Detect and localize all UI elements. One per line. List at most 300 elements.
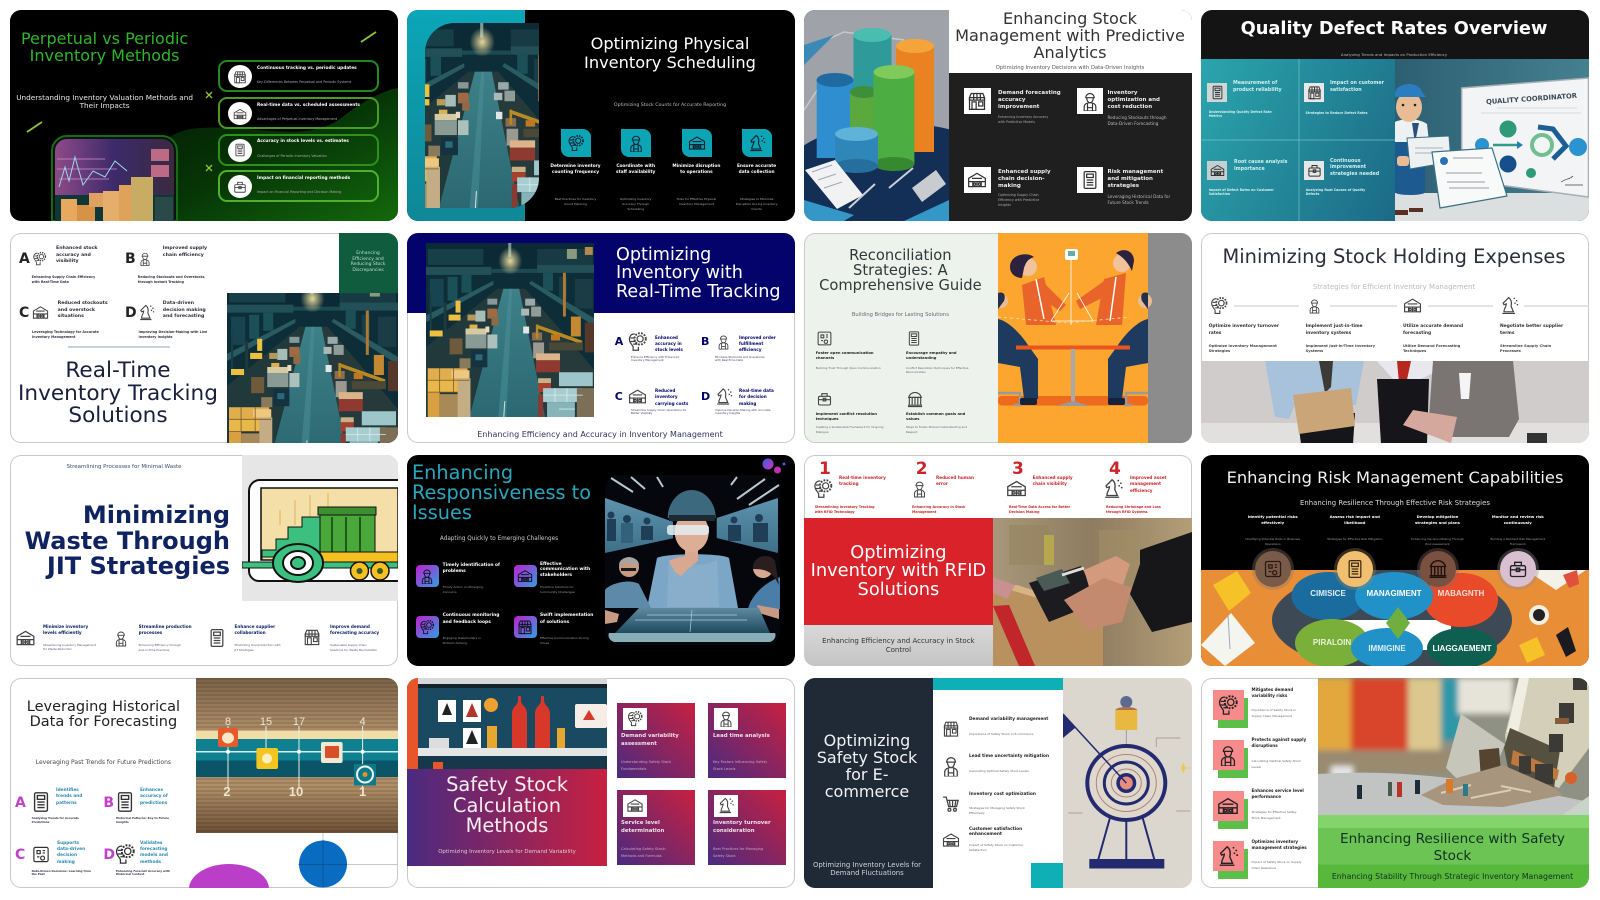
- item text: Impact on customer: [1330, 81, 1384, 86]
- icon: [1005, 478, 1028, 499]
- item note: Reducing Shrinkage and Loss: [1106, 504, 1161, 508]
- image: warehouse: [425, 23, 539, 208]
- step: develop: [1396, 513, 1479, 589]
- item note: Data-Driven Forecasting: [1108, 121, 1158, 126]
- item A: [615, 330, 699, 366]
- image: recycling truck illustration: [242, 455, 398, 601]
- item text: [257, 176, 350, 194]
- card text: Inventory turnover: [713, 820, 771, 826]
- item text: Validates: [140, 841, 162, 846]
- item note: Enhancing Inventory Accuracy: [998, 114, 1048, 118]
- letter: A: [19, 250, 30, 266]
- item note: Proactive Solutions for: [540, 585, 574, 589]
- item note: Better Visibility: [631, 411, 652, 415]
- step note: Risk Assessment: [1425, 542, 1450, 546]
- item note: [234, 643, 280, 653]
- item: demand variability: [940, 718, 1058, 740]
- item text: decision: [57, 853, 77, 858]
- step note: Enhancing Decision-Making Through: [1411, 536, 1464, 540]
- card note: Methods and Formulas: [621, 854, 662, 858]
- item note: Supply Chain Management: [1252, 714, 1292, 718]
- item note: Steps to Foster Mutual Understanding and: [906, 425, 967, 429]
- item text: [443, 613, 499, 627]
- title: Responsiveness to: [412, 481, 591, 504]
- item text: [936, 475, 974, 488]
- panel: Optimizing Inventory with Real-Time Tracking: [407, 232, 794, 443]
- step: minimize disruption: [672, 129, 720, 206]
- letter: D: [125, 304, 137, 320]
- item note: Strategies for Managing Safety Stock: [969, 806, 1025, 810]
- item text: Supports: [57, 841, 79, 846]
- item text: Continuous monitoring: [443, 613, 499, 618]
- icon: [940, 755, 962, 776]
- image: collapsed building miniature: [1318, 678, 1589, 816]
- item note: Conflict Resolution Techniques for Effective: [906, 366, 968, 370]
- icon: [911, 478, 928, 499]
- step text: [616, 164, 656, 175]
- number: 3: [1012, 459, 1024, 479]
- card text: assessment: [621, 741, 657, 747]
- item text: [816, 412, 877, 422]
- icon: [302, 628, 322, 646]
- callout text: [351, 251, 385, 273]
- item note: [32, 816, 79, 824]
- image: strategy circles on desk: [1201, 570, 1589, 666]
- item note: [540, 585, 575, 596]
- item text: channels: [816, 356, 834, 360]
- item text: for decision: [739, 394, 767, 399]
- title: Optimizing: [850, 542, 947, 563]
- item text: Minimize inventory: [43, 624, 88, 629]
- card text: determination: [621, 828, 664, 834]
- card text: [621, 732, 679, 748]
- item note: [631, 408, 686, 416]
- item note: Enhancing Efficiency through: [139, 643, 181, 647]
- item note: Efficiency with Predictive: [998, 198, 1039, 202]
- card text: Lead time analysis: [713, 733, 770, 739]
- image: timeline on wood: [196, 678, 398, 832]
- panel: Enhancing Risk Management Capabilities: [1201, 455, 1588, 666]
- step: ensure accurate data: [736, 129, 778, 211]
- item note: Importance of Safety Stock in E-commerce: [969, 732, 1033, 736]
- callout text: Discrepancies: [352, 268, 384, 273]
- title: Minimizing Stock Holding Expenses: [1223, 244, 1565, 268]
- icon tile: [1213, 790, 1244, 820]
- icon tile: [416, 616, 439, 638]
- panel: Minimizing Stock Holding Expenses: [1201, 232, 1588, 443]
- item note: [138, 330, 207, 340]
- item note: for Waste Reduction: [43, 647, 72, 651]
- item text: Challenges of Periodic Inventory Valuation: [257, 154, 327, 158]
- card note: [621, 846, 666, 859]
- icon: [1207, 161, 1226, 180]
- item B: [701, 330, 785, 366]
- item text: Accuracy in stock levels vs. estimates: [257, 139, 349, 144]
- item text: chain efficiency: [163, 253, 204, 258]
- step note: Scheduling: [627, 207, 644, 211]
- title: Reconciliation: [849, 246, 952, 264]
- image: handheld RFID scanner over box: [993, 518, 1192, 666]
- item: service level: [1213, 790, 1313, 826]
- item text: Continuous tracking vs. periodic updates: [257, 66, 357, 70]
- title: commerce: [825, 782, 909, 800]
- item: demand forecasting: [964, 88, 1061, 124]
- step note: [1245, 536, 1300, 547]
- icon: [627, 386, 648, 406]
- item note: [1306, 188, 1365, 197]
- item text: Enhanced supply: [1033, 475, 1073, 480]
- title: Strategies: A: [853, 262, 948, 279]
- item text: chain decision-: [998, 176, 1045, 182]
- step text: Assess risk impact and: [1330, 514, 1380, 518]
- icon: [1304, 161, 1324, 180]
- item text: Enhanced stock: [56, 246, 97, 251]
- icon: [906, 330, 922, 346]
- icon: [1403, 296, 1422, 315]
- item text: Enhances: [140, 788, 163, 792]
- item text: [140, 788, 168, 808]
- item text: Real-time inventory: [839, 475, 886, 480]
- number: 17: [293, 716, 305, 728]
- item B: [103, 788, 188, 828]
- item text: [1252, 737, 1306, 749]
- item note: [443, 636, 481, 646]
- icon: [32, 304, 49, 320]
- icon: [623, 708, 647, 730]
- item text: [139, 624, 192, 636]
- step note: Strategies for Effective Risk Mitigation: [1327, 536, 1382, 540]
- item text: [163, 301, 206, 321]
- step note: Best Practices for Inventory: [555, 196, 596, 200]
- icon: [113, 628, 129, 648]
- number: 2: [916, 459, 928, 479]
- subtitle: Analyzing Trends and Impacts on Production Efficiency: [1341, 52, 1447, 57]
- item 1: [812, 459, 904, 515]
- label: IMMIGINE: [1368, 644, 1406, 653]
- icon: [113, 791, 137, 813]
- item note: [139, 643, 181, 653]
- title: for E-: [846, 764, 888, 784]
- title: Safety Stock: [817, 748, 917, 766]
- title: [584, 34, 756, 72]
- item note: Inventory Management: [32, 335, 75, 339]
- step text: [1248, 514, 1298, 526]
- number: 1: [819, 459, 831, 479]
- step text: [672, 164, 720, 175]
- item text: visibility: [56, 259, 79, 264]
- item note: with Real-Time Data: [715, 358, 743, 362]
- green title band: [1318, 815, 1589, 888]
- item text: and forecasting: [163, 314, 204, 319]
- item text: [43, 624, 88, 636]
- image: dashboard with boxes: [51, 135, 178, 221]
- item text: carrying costs: [655, 401, 688, 406]
- item note: [1106, 504, 1161, 515]
- panel: Minimizing Waste Through JIT Strategies: [10, 455, 398, 666]
- item: swift implementation: [514, 616, 604, 648]
- item text: [443, 563, 500, 575]
- image: futuristic control room: [605, 475, 780, 645]
- icon tile: [1213, 740, 1244, 770]
- item text: enhancement: [969, 832, 1002, 837]
- letter: D: [103, 846, 115, 862]
- item text: Improved order: [739, 334, 776, 340]
- item text: making: [998, 182, 1021, 188]
- item note: Optimize Inventory Management: [1209, 344, 1277, 348]
- item note: Strategies to Reduce Defect Rates: [1306, 110, 1368, 114]
- icon: [15, 628, 36, 648]
- item note: [1009, 504, 1070, 515]
- icon: [940, 720, 962, 738]
- step text: data collection: [739, 170, 775, 175]
- item note: [1209, 344, 1277, 355]
- item text: data-driven: [57, 847, 85, 852]
- item text: [1306, 323, 1363, 337]
- title: Optimizing: [616, 245, 711, 265]
- label: CIMISICE: [1310, 589, 1346, 598]
- subtitle: Strategies for Efficient Inventory Management: [1313, 282, 1475, 290]
- item note: Reconciliation: [906, 370, 926, 374]
- item note: Impact of Defect Rates on Customer: [1209, 188, 1274, 192]
- item: conflict resolution: [816, 391, 901, 435]
- title: Enhancing Risk Management Capabilities: [1227, 468, 1563, 487]
- item note: Effectively: [969, 811, 985, 815]
- item text: models and: [140, 853, 168, 858]
- icon tile: [561, 129, 591, 157]
- item text: trends and: [56, 794, 82, 799]
- item note: Systems: [1306, 349, 1323, 353]
- item text: satisfaction: [1330, 88, 1362, 93]
- list item: continuous tracking: [218, 60, 379, 92]
- letter: A: [15, 794, 26, 810]
- panel: Enhancing Responsiveness to Issues: [407, 455, 794, 666]
- label: LIAGGAEMENT: [1432, 644, 1492, 653]
- card note: Best Practices for Managing: [713, 847, 763, 851]
- step text: Determine inventory: [550, 164, 601, 168]
- panel: Optimizing Safety Stock for E-commerce: [804, 678, 1192, 888]
- item text: [56, 246, 97, 266]
- panel: Real-Time Inventory Tracking Solutions: [10, 232, 398, 443]
- item: supplier terms: [1500, 296, 1585, 356]
- item: open communication: [816, 330, 901, 372]
- title: Leveraging Historical: [27, 699, 180, 715]
- item text: Implement conflict resolution: [816, 412, 877, 416]
- item: lead time: [940, 754, 1058, 778]
- item text: [257, 102, 360, 121]
- title: Perpetual vs Periodic: [21, 29, 188, 48]
- item note: Implement Just-in-Time Inventory: [1306, 344, 1375, 348]
- step note: Operations: [1265, 542, 1281, 546]
- item text: values: [906, 416, 919, 420]
- item text: Improve demand: [330, 624, 370, 629]
- item text: [816, 350, 874, 360]
- item text: Improved supply: [163, 246, 207, 251]
- icon: [138, 304, 155, 320]
- image: warehouse: [426, 242, 594, 416]
- item note: Chain Resilience: [1252, 866, 1276, 870]
- item text: product reliability: [1233, 88, 1282, 93]
- timeline numbers: [196, 712, 398, 798]
- item note: Solutions for Waste Minimization: [330, 648, 377, 652]
- item text: Identifies: [56, 788, 79, 792]
- item note: [1252, 860, 1301, 871]
- subtitle: Optimizing Inventory Decisions with Data-Driven Insights: [996, 65, 1144, 71]
- green shadow tile: [1218, 849, 1248, 879]
- item text: Demand forecasting: [998, 90, 1061, 96]
- item note: Just-in-Time Practices: [139, 648, 169, 652]
- item note: [1108, 114, 1166, 126]
- item text: Inventory: [1108, 90, 1137, 96]
- item text: Demand variability management: [969, 717, 1048, 722]
- step text: staff availability: [616, 170, 655, 175]
- item text: Foster open communication: [816, 350, 874, 354]
- item note: [330, 643, 377, 653]
- item note: [1252, 810, 1296, 821]
- step text: Develop mitigation: [1417, 514, 1458, 518]
- item text: Lead time uncertainty mitigation: [969, 754, 1049, 759]
- item text: strategies needed: [1330, 172, 1379, 177]
- item note: [443, 585, 483, 596]
- item note: Metrics: [1209, 114, 1222, 118]
- item text: Reduced stockouts: [58, 301, 108, 306]
- image: 3D cylinder chart: [804, 10, 949, 221]
- item D: [701, 388, 785, 424]
- item note: [912, 504, 965, 515]
- item text: [330, 624, 379, 636]
- item text: Negotiate better supplier: [1500, 324, 1563, 329]
- letter: B: [701, 334, 709, 348]
- item 4: [1102, 459, 1191, 515]
- item: optimizes strategies: [1213, 841, 1313, 876]
- green shadow tile: [1218, 698, 1248, 728]
- panel: Enhancing Stock Management with Predictive Analytics: [804, 10, 1192, 220]
- panel: Safety Stock Calculation Methods: [407, 678, 794, 888]
- title: Inventory Scheduling: [584, 53, 756, 72]
- item text: improvement: [998, 104, 1039, 110]
- item text: [1108, 90, 1160, 110]
- item note: Engaging Stakeholders in: [443, 636, 481, 640]
- item note: Levels: [1252, 765, 1261, 769]
- step text: continuously: [1504, 520, 1532, 525]
- item note: Historical Patterns: Key to Future: [116, 816, 169, 820]
- title: Methods: [466, 814, 548, 837]
- green callout box: [339, 232, 398, 292]
- item text: improvement: [1330, 165, 1366, 170]
- item note: [1306, 344, 1375, 355]
- eyebrow subtitle: Streamlining Processes for Minimal Waste: [66, 464, 182, 470]
- card text: consideration: [713, 828, 755, 834]
- step note: [676, 196, 716, 206]
- card note: Fundamentals: [621, 767, 646, 771]
- board heading: QUALITY COORDINATOR: [1486, 92, 1577, 106]
- icon: [1076, 167, 1103, 193]
- item note: Inventory Management: [631, 358, 664, 362]
- item note: Sustainable Supply Chain: [330, 643, 367, 647]
- subtitle: Optimizing Stock Counts for Accurate Reporting: [614, 102, 726, 108]
- item text: disruptions: [1252, 743, 1278, 748]
- title: Stock: [1434, 848, 1471, 864]
- item note: Impact of Safety Stock on Supply: [1252, 860, 1301, 864]
- footer subtitle: Enhancing Efficiency and Accuracy in Inventory Management: [477, 430, 723, 439]
- item note: Utilize Demand Forecasting: [1403, 344, 1460, 348]
- item note: Defects: [1306, 192, 1319, 196]
- item text: terms: [1500, 331, 1514, 336]
- subtitle: Leveraging Past Trends for Future Predictions: [36, 758, 171, 766]
- step text: Monitor and review risk: [1492, 514, 1544, 518]
- letter: C: [15, 846, 25, 862]
- item text: [1330, 80, 1384, 94]
- item text: patterns: [56, 801, 77, 806]
- step text: Minimize disruption: [672, 164, 720, 168]
- image: business handshake illustration: [998, 232, 1192, 444]
- item note: Management: [912, 510, 936, 514]
- item text: Optimizes inventory: [1252, 838, 1298, 844]
- subtitle: [16, 92, 193, 110]
- green shadow tile: [1218, 748, 1248, 778]
- title: [1340, 831, 1565, 864]
- item note: the Past: [32, 872, 45, 876]
- step text: [737, 164, 776, 175]
- item text: stakeholders: [540, 573, 572, 578]
- item note: Enhancing Accuracy in Stock: [912, 504, 965, 508]
- item note: Analyzing Root Causes of Quality: [1306, 188, 1365, 192]
- white header: [949, 10, 1192, 73]
- item: customer satisfaction: [940, 828, 1058, 854]
- step note: Count Planning: [564, 202, 587, 206]
- step: monitor: [1476, 513, 1559, 589]
- item note: [815, 504, 875, 515]
- grey subtitle block: [804, 625, 993, 666]
- card note: [713, 846, 763, 859]
- item: product reliability: [1207, 80, 1282, 118]
- title: Data for Forecasting: [30, 714, 177, 730]
- item text: [540, 613, 593, 627]
- step note: Strategies to Minimize: [740, 196, 773, 200]
- subtitle: [813, 861, 921, 878]
- icon: [816, 391, 833, 407]
- step note: [736, 196, 778, 211]
- item text: strategies: [1108, 182, 1139, 188]
- icon: circle: [228, 102, 252, 125]
- item note: [969, 843, 1023, 853]
- icon: [138, 250, 152, 267]
- title: Minimizing: [83, 501, 230, 529]
- icon: [28, 845, 52, 864]
- item text: Continuous: [1330, 158, 1361, 164]
- card note: Understanding Safety Stock: [621, 760, 671, 764]
- icon tile: [742, 129, 772, 157]
- item: cost optimization: [940, 792, 1058, 816]
- item note: [631, 356, 679, 363]
- item text: Impact on Financial Reporting and Decision Making: [257, 190, 341, 194]
- item: feedback loops: [416, 616, 506, 648]
- step text: [1415, 514, 1460, 526]
- item text: [57, 841, 85, 866]
- item text: [1130, 475, 1167, 495]
- icon: [964, 88, 990, 114]
- item text: Improved asset: [1130, 475, 1167, 480]
- step text: counting frequency: [552, 170, 599, 175]
- item text: Enhances service level: [1252, 788, 1304, 793]
- card note: Safety Stock: [713, 854, 736, 858]
- letter: D: [701, 390, 710, 402]
- title: Waste Through: [25, 527, 230, 555]
- item note: Reducing Stockouts through: [1108, 114, 1166, 120]
- subtitle: Enhancing Stability Through Strategic Inventory Management: [1332, 872, 1573, 880]
- subtitle: Optimizing Inventory Levels for: [813, 861, 921, 869]
- icon: [32, 250, 46, 267]
- icon: [113, 842, 137, 864]
